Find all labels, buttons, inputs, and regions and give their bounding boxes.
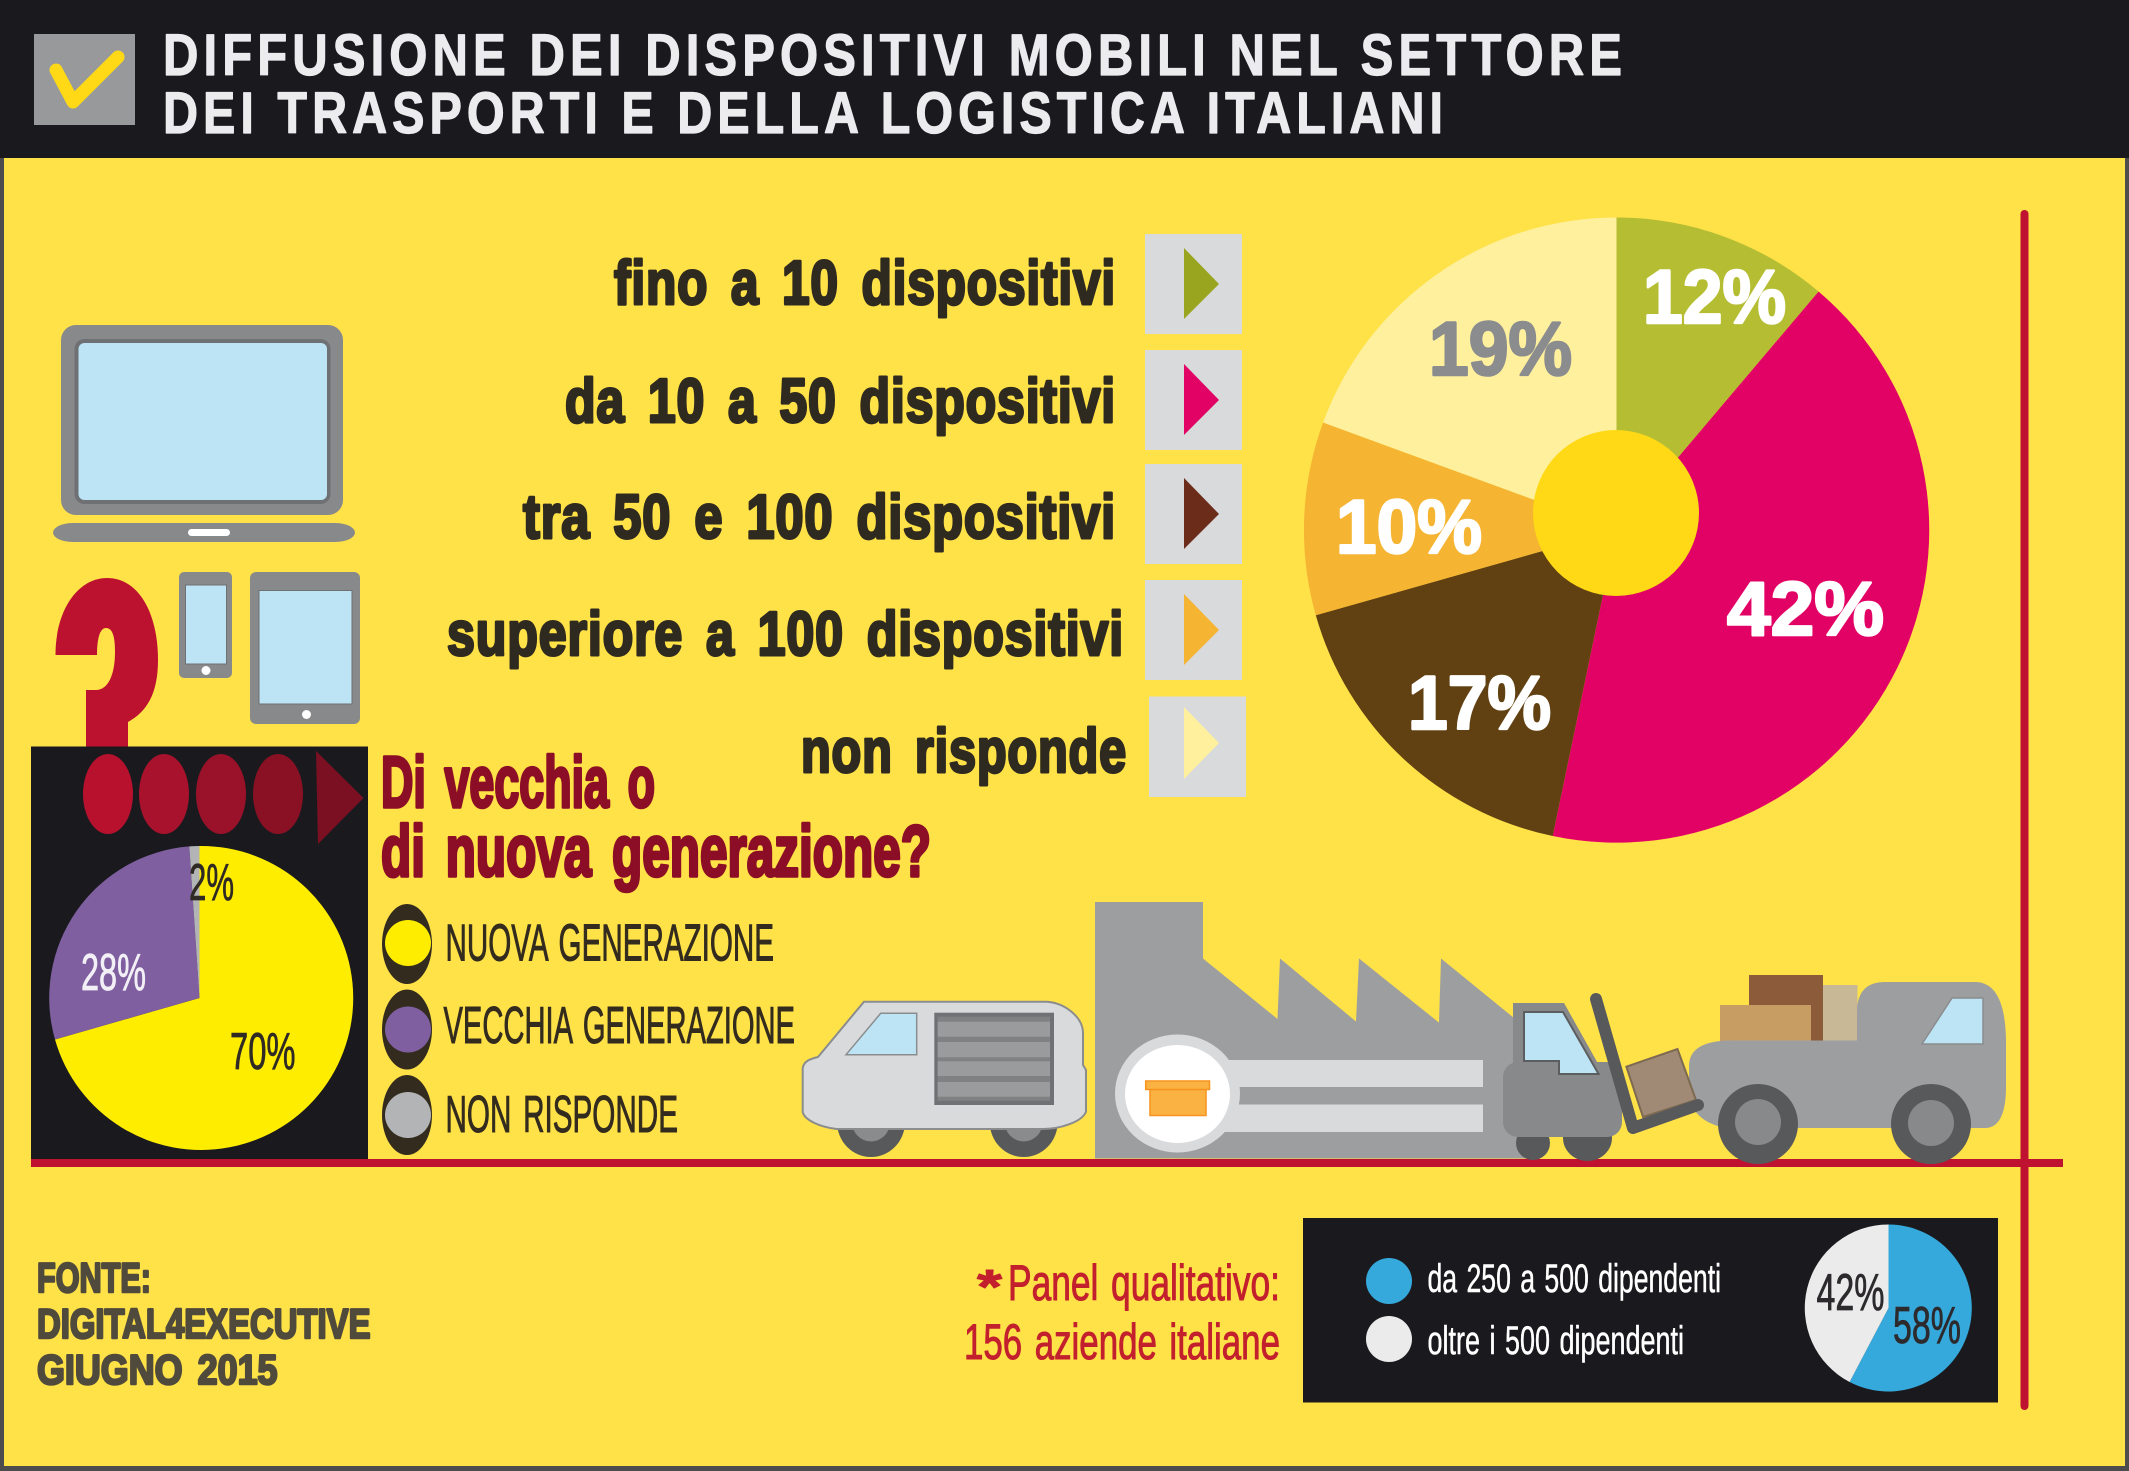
icon: van <box>803 1002 1086 1157</box>
asterisk: * <box>977 1261 1002 1314</box>
vertical line <box>2020 210 2028 1410</box>
horizontal baseline <box>31 1159 2063 1167</box>
icon: laptop <box>53 325 355 542</box>
pie chart: employees <box>1805 1224 1972 1391</box>
pie labels: 19% <box>1429 307 1572 392</box>
decorative ovals and arrow <box>83 751 364 844</box>
legend: generation: VECCHIA GENERAZIONE <box>444 997 795 1055</box>
heading: generation question: di nuova generazione? <box>381 812 931 892</box>
device count labels: non risponde <box>801 717 1127 786</box>
icon: forklift <box>1503 999 1698 1161</box>
panel note: Panel qualitativo: <box>1008 1255 1280 1311</box>
legend: generation: NUOVA GENERAZIONE <box>446 914 774 972</box>
legend: employees: da 250 a 500 dipendenti <box>1428 1257 1721 1301</box>
pie chart: devices <box>1304 218 1929 843</box>
pie labels: 42% <box>1727 567 1884 652</box>
pie labels: 10% <box>1336 485 1482 570</box>
source credit: DIGITAL4EXECUTIVE <box>37 1300 370 1347</box>
device count labels: tra 50 e 100 dispositivi <box>523 483 1116 552</box>
pie chart: generation: 70% <box>230 1023 296 1081</box>
title: DEI TRASPORTI E DELLA LOGISTICA ITALIANI <box>163 81 1448 146</box>
device count labels: da 10 a 50 dispositivi <box>565 367 1116 436</box>
icon: smartphone <box>179 572 232 678</box>
icon: check mark <box>34 34 135 125</box>
heading: generation question <box>381 743 931 892</box>
legend: employees: oltre i 500 dipendenti <box>1428 1319 1684 1363</box>
panel: employees <box>1303 1218 1998 1402</box>
wheels: truck <box>1718 1084 1971 1164</box>
icon: truck <box>1689 975 2006 1128</box>
pie chart: generation <box>49 846 353 1150</box>
icon: tablet <box>250 572 360 724</box>
source credit <box>37 1254 370 1393</box>
source credit: FONTE: <box>37 1254 151 1301</box>
pie labels: 12% <box>1643 255 1786 340</box>
icon: question mark <box>56 578 158 750</box>
device count labels <box>447 249 1127 786</box>
pie chart: employees: 58% <box>1893 1297 1961 1355</box>
legend: generation: NON RISPONDE <box>446 1086 678 1144</box>
pie labels: 17% <box>1408 661 1551 746</box>
header band <box>0 0 2129 158</box>
legend arrows: device counts <box>1145 234 1246 797</box>
panel note: 156 aziende italiane <box>964 1314 1280 1370</box>
pie chart: generation: 28% <box>81 944 146 1002</box>
pie chart: employees: 42% <box>1816 1264 1884 1322</box>
device count labels: fino a 10 dispositivi <box>614 249 1116 318</box>
title: DIFFUSIONE DEI DISPOSITIVI MOBILI NEL SETTORE <box>163 23 1627 88</box>
pie labels <box>1336 255 1884 746</box>
source credit: GIUGNO 2015 <box>37 1346 278 1393</box>
legend: employees <box>1366 1257 1721 1363</box>
title <box>163 23 1627 146</box>
icon: factory <box>1095 902 1530 1158</box>
heading: generation question: Di vecchia o <box>381 743 655 823</box>
device count labels: superiore a 100 dispositivi <box>447 600 1124 669</box>
panel: generation chart <box>31 746 368 1160</box>
pie chart: generation: 2% <box>189 854 234 912</box>
panel note <box>964 1255 1280 1370</box>
legend: generation <box>382 904 795 1155</box>
